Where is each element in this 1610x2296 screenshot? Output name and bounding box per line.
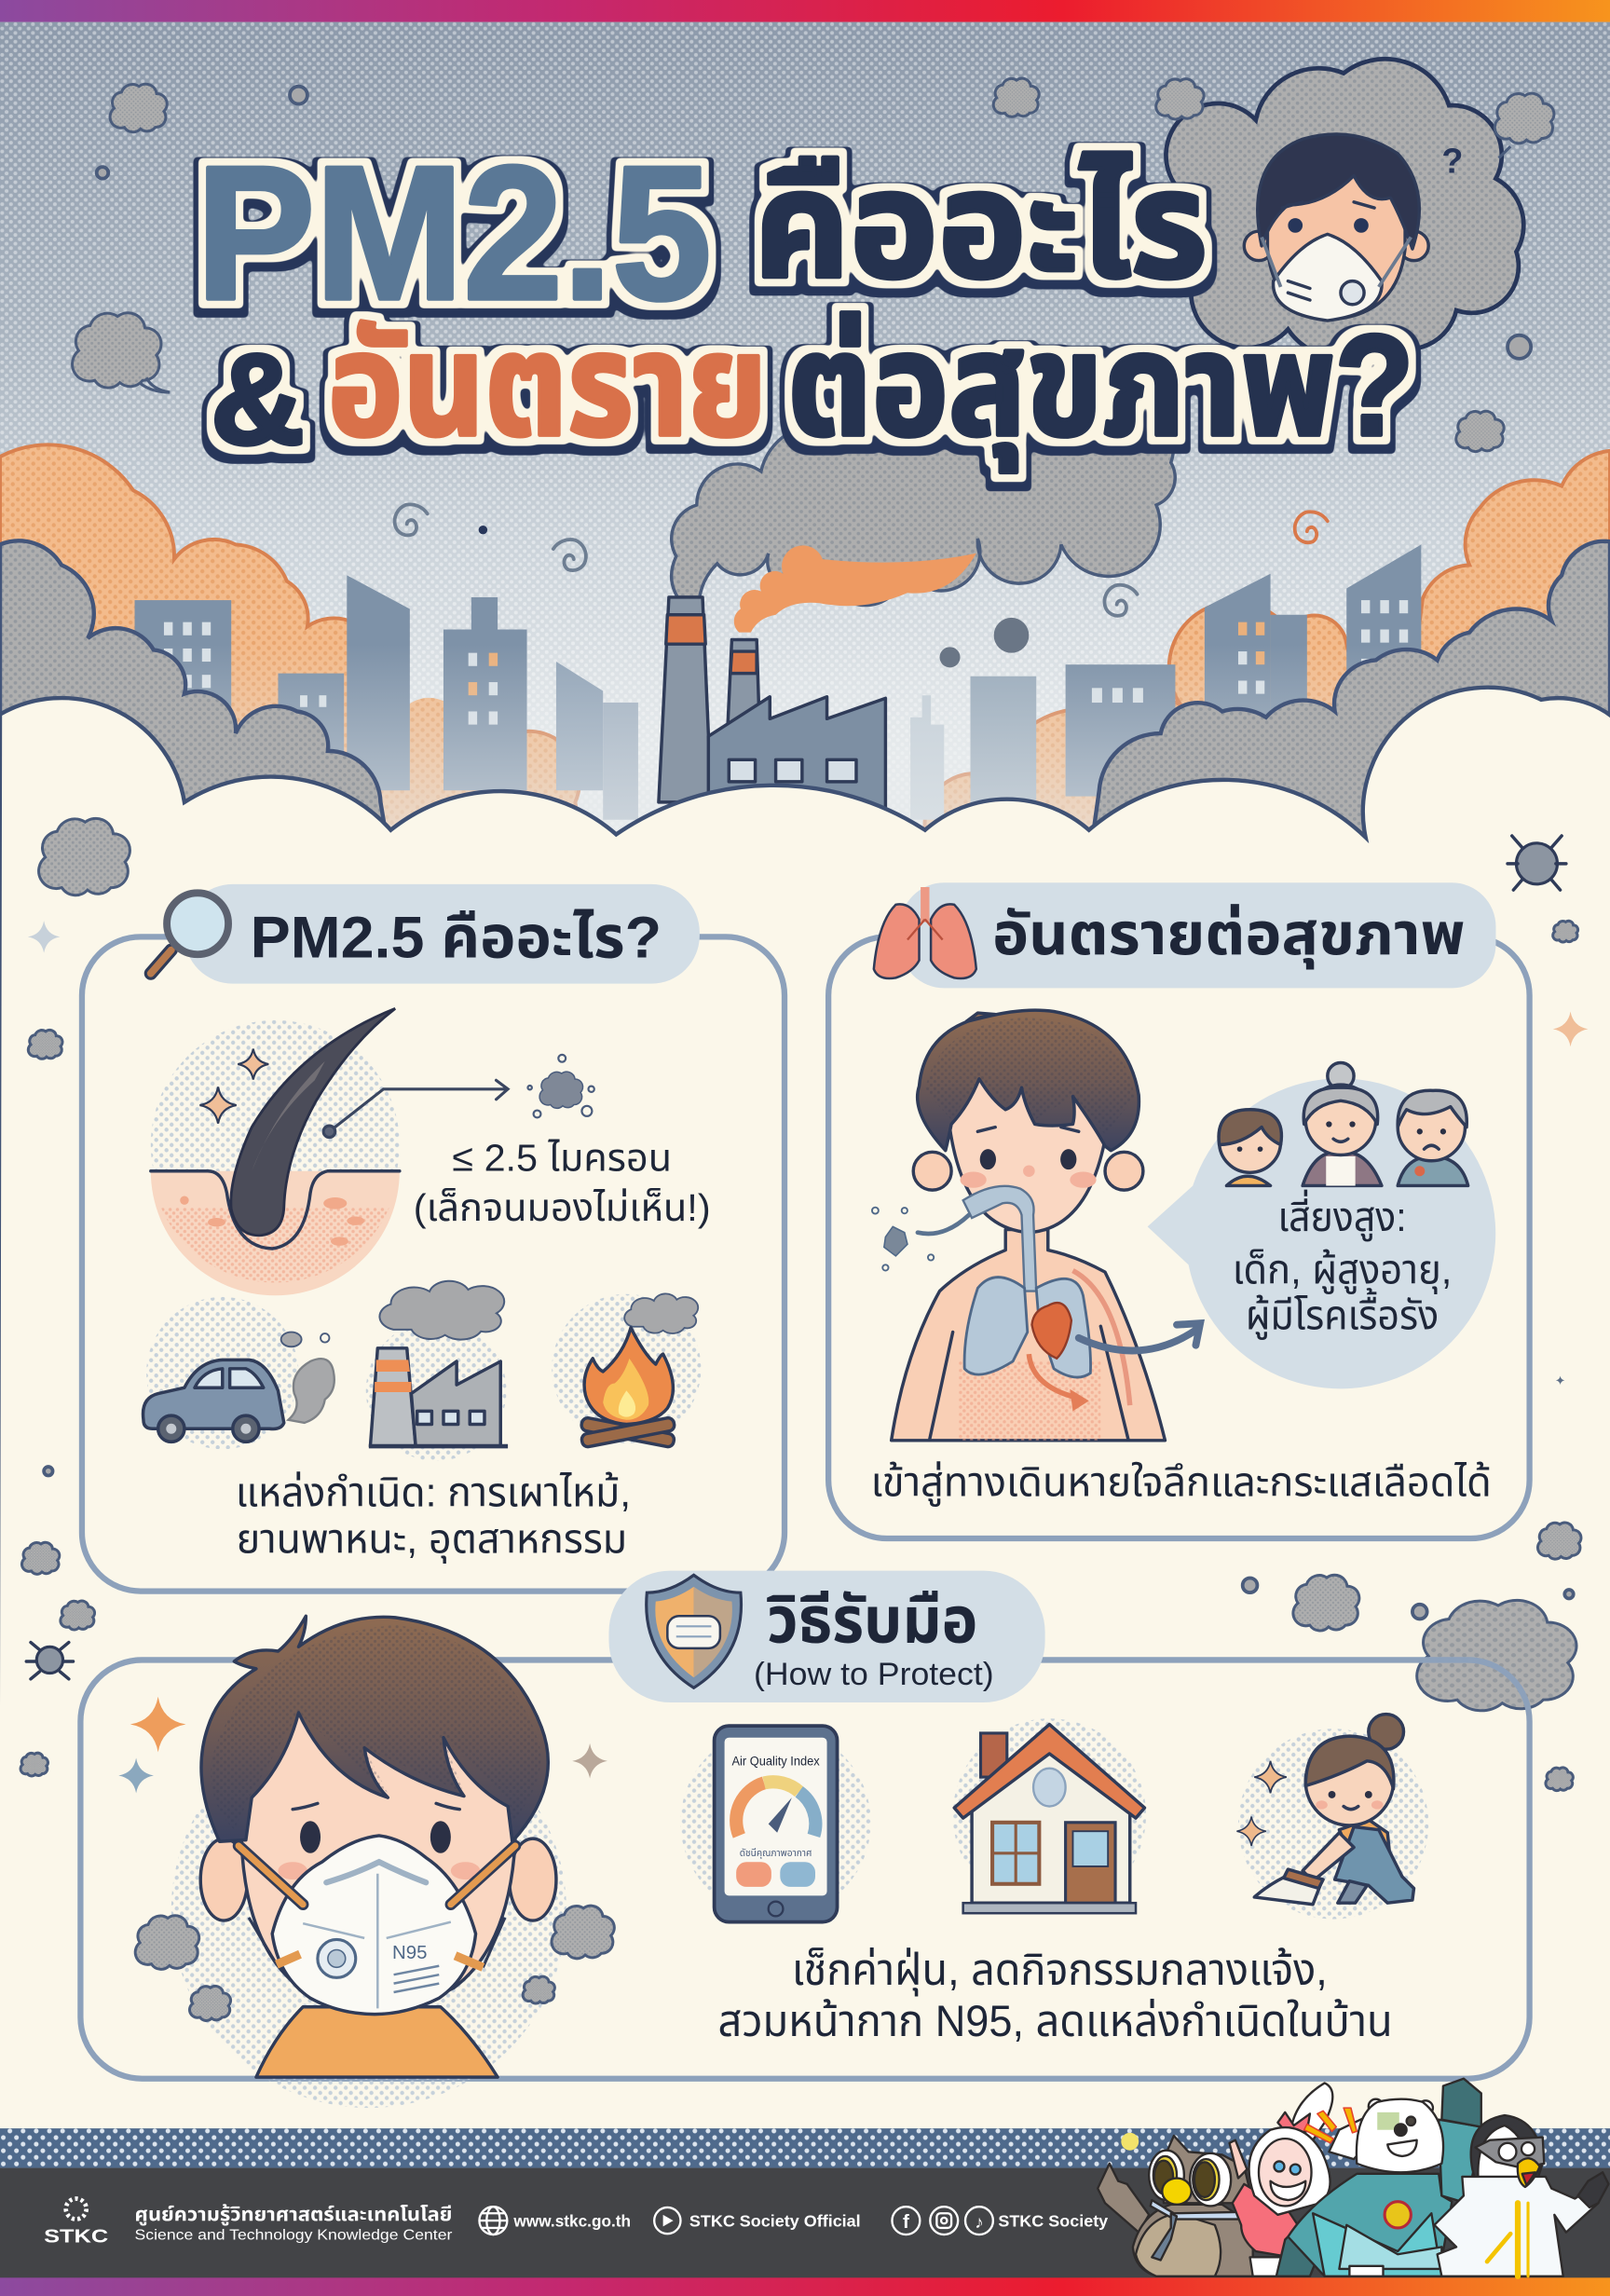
heading pill <box>608 1571 1045 1702</box>
large boy wearing N95 mask: N95 <box>392 1943 427 1963</box>
icon: child cleaning floor <box>1236 1715 1428 1919</box>
footer: STKC logo <box>44 2199 109 2248</box>
icon: dust bug, lower left <box>26 1643 74 1679</box>
smoke cloud with masked face <box>1142 59 1523 358</box>
sparkles, margins <box>28 921 1588 1385</box>
panel frame <box>828 936 1530 1538</box>
footer: mascots <box>1098 2079 1608 2276</box>
panel frame <box>82 936 785 1592</box>
title: line two <box>211 306 1413 472</box>
small ring particles <box>44 87 1574 1619</box>
heading text <box>754 1584 994 1692</box>
icon: house <box>953 1718 1146 1913</box>
footer: organisation name: ศูนย์ความรู้วิทยาศาสตร์และเทคโนโลยี <box>135 2204 452 2226</box>
title word: คืออะไร: คืออะไร <box>754 142 1208 308</box>
footer: YouTube: STKC Society Official <box>689 2211 861 2230</box>
text: risk groups: ผู้มีโรคเรื้อรัง <box>1246 1287 1439 1340</box>
icon: phone with air quality index <box>680 1726 871 1922</box>
footer: gradient bar <box>0 2277 1610 2296</box>
hair illustration <box>151 1008 400 1295</box>
panel: อันตรายต่อสุขภาพ <box>828 882 1530 1538</box>
cream content background with cloud edge <box>0 688 1610 2131</box>
scene: dark particles in the sky <box>479 526 1029 667</box>
icon: dust bug, upper right <box>1508 836 1566 890</box>
scene: swirls and specks <box>395 504 1328 616</box>
scene: city skyline <box>135 544 1421 820</box>
speech bubble: risk groups <box>1148 1062 1495 1388</box>
polar bear mascot <box>1276 2079 1482 2276</box>
title word: PM2.5: PM2.5 <box>197 127 711 339</box>
text: size: (เล็กจนมองไม่เห็น!) <box>414 1186 711 1229</box>
title word: ต่อสุขภาพ?: ต่อสุขภาพ? <box>787 306 1413 472</box>
panel: วิธีรับมือ <box>80 1571 1530 2108</box>
icon: phone with air quality index: ดัชนีคุณภาพอากาศ <box>740 1848 812 1859</box>
icon: magnifier <box>151 893 228 974</box>
footer: YouTube <box>654 2207 861 2234</box>
question mark: ? <box>1441 141 1463 180</box>
text: pathway: เข้าสู่ทางเดินหายใจลึกและกระแสเลือดได้ <box>871 1459 1492 1507</box>
boy with lungs illustration <box>872 1010 1165 1441</box>
rabbit hood mascot <box>1230 2083 1379 2276</box>
footer: social icons: STKC Society <box>998 2211 1109 2230</box>
heading text: วิธีรับมือ <box>766 1584 977 1657</box>
icon: shield with mask <box>647 1575 742 1688</box>
heading text: อันตรายต่อสุขภาพ <box>992 902 1465 969</box>
cloud tails <box>141 146 1510 392</box>
heading pill <box>184 884 700 984</box>
icon: factory <box>366 1281 508 1461</box>
icon: car with exhaust <box>143 1297 334 1449</box>
scene: factory and chimneys <box>659 597 885 820</box>
text: size: ≤ 2.5 ไมครอน <box>452 1137 672 1180</box>
text: sources <box>236 1469 631 1565</box>
owl mascot <box>1098 2136 1253 2276</box>
footer: social icons: ♪ <box>975 2212 984 2232</box>
footer: social icons <box>892 2207 1109 2234</box>
scene: grey clouds <box>0 540 1610 879</box>
heading pill <box>900 882 1495 988</box>
top gradient bar <box>0 0 1610 22</box>
scene: smoke plume, orange <box>734 545 976 633</box>
panel: PM2.5 คืออะไร <box>82 884 785 1592</box>
title word: ampersand: & <box>211 328 305 472</box>
text: risk groups: เสี่ยงสูง: <box>1277 1189 1407 1242</box>
red-yellow exclamation marks <box>1304 2108 1357 2143</box>
sky background <box>0 22 1610 885</box>
icon: grandmother <box>1303 1062 1382 1185</box>
footer: patterned band <box>0 2128 1610 2168</box>
text: size <box>414 1137 711 1229</box>
icon: face with mask <box>1244 134 1428 321</box>
footer: organisation name <box>135 2204 452 2244</box>
text: protective actions: เช็กค่าฝุ่น, ลดกิจกรรมกลางแจ้ง, <box>792 1945 1328 1996</box>
icon: campfire <box>552 1293 701 1448</box>
decorative floating clouds <box>20 78 1581 1791</box>
footer: organisation name: Science and Technology Knowledge Center <box>135 2228 452 2244</box>
title word: อันตราย: อันตราย <box>328 306 767 466</box>
heading text: (How to Protect) <box>754 1657 994 1692</box>
text: protective actions <box>718 1945 1393 2045</box>
text: risk groups: เด็ก, ผู้สูงอายุ, <box>1233 1248 1452 1295</box>
scene: orange clouds <box>0 444 1610 879</box>
footer: dark bar <box>0 2168 1610 2279</box>
icon: phone with air quality index: Air Quality Index <box>731 1755 820 1769</box>
icon: elderly man <box>1398 1090 1468 1185</box>
icon: child <box>1219 1110 1281 1185</box>
arrow to risk bubble <box>1079 1323 1200 1350</box>
footer: social icons: f <box>903 2212 909 2233</box>
pointer arrow <box>323 1080 508 1138</box>
panel frame <box>80 1660 1530 2079</box>
large boy wearing N95 mask <box>118 1616 607 2108</box>
text: risk groups <box>1233 1189 1452 1340</box>
clouds around boy <box>135 1906 614 2021</box>
light bulb idea <box>1121 2133 1139 2151</box>
text: sources: ยานพาหนะ, อุตสาหกรรม <box>237 1517 627 1565</box>
scene: smoke plume, grey <box>672 401 1175 606</box>
heading text: PM2.5 คืออะไร? <box>251 905 662 970</box>
text: protective actions: สวมหน้ากาก N95, ลดแหล่งกำเนิดในบ้าน <box>718 1996 1393 2045</box>
title: line one <box>197 127 1208 339</box>
text: sources: แหล่งกำเนิด: การเผาไหม้, <box>236 1469 631 1515</box>
footer: website <box>479 2207 631 2234</box>
penguin mascot <box>1434 2115 1608 2276</box>
footer: STKC logo: STKC <box>44 2227 109 2248</box>
footer: website: www.stkc.go.th <box>512 2211 631 2230</box>
scene: haze over skyline <box>0 644 1610 834</box>
icon: lungs <box>874 887 976 978</box>
dust particle <box>527 1055 594 1117</box>
